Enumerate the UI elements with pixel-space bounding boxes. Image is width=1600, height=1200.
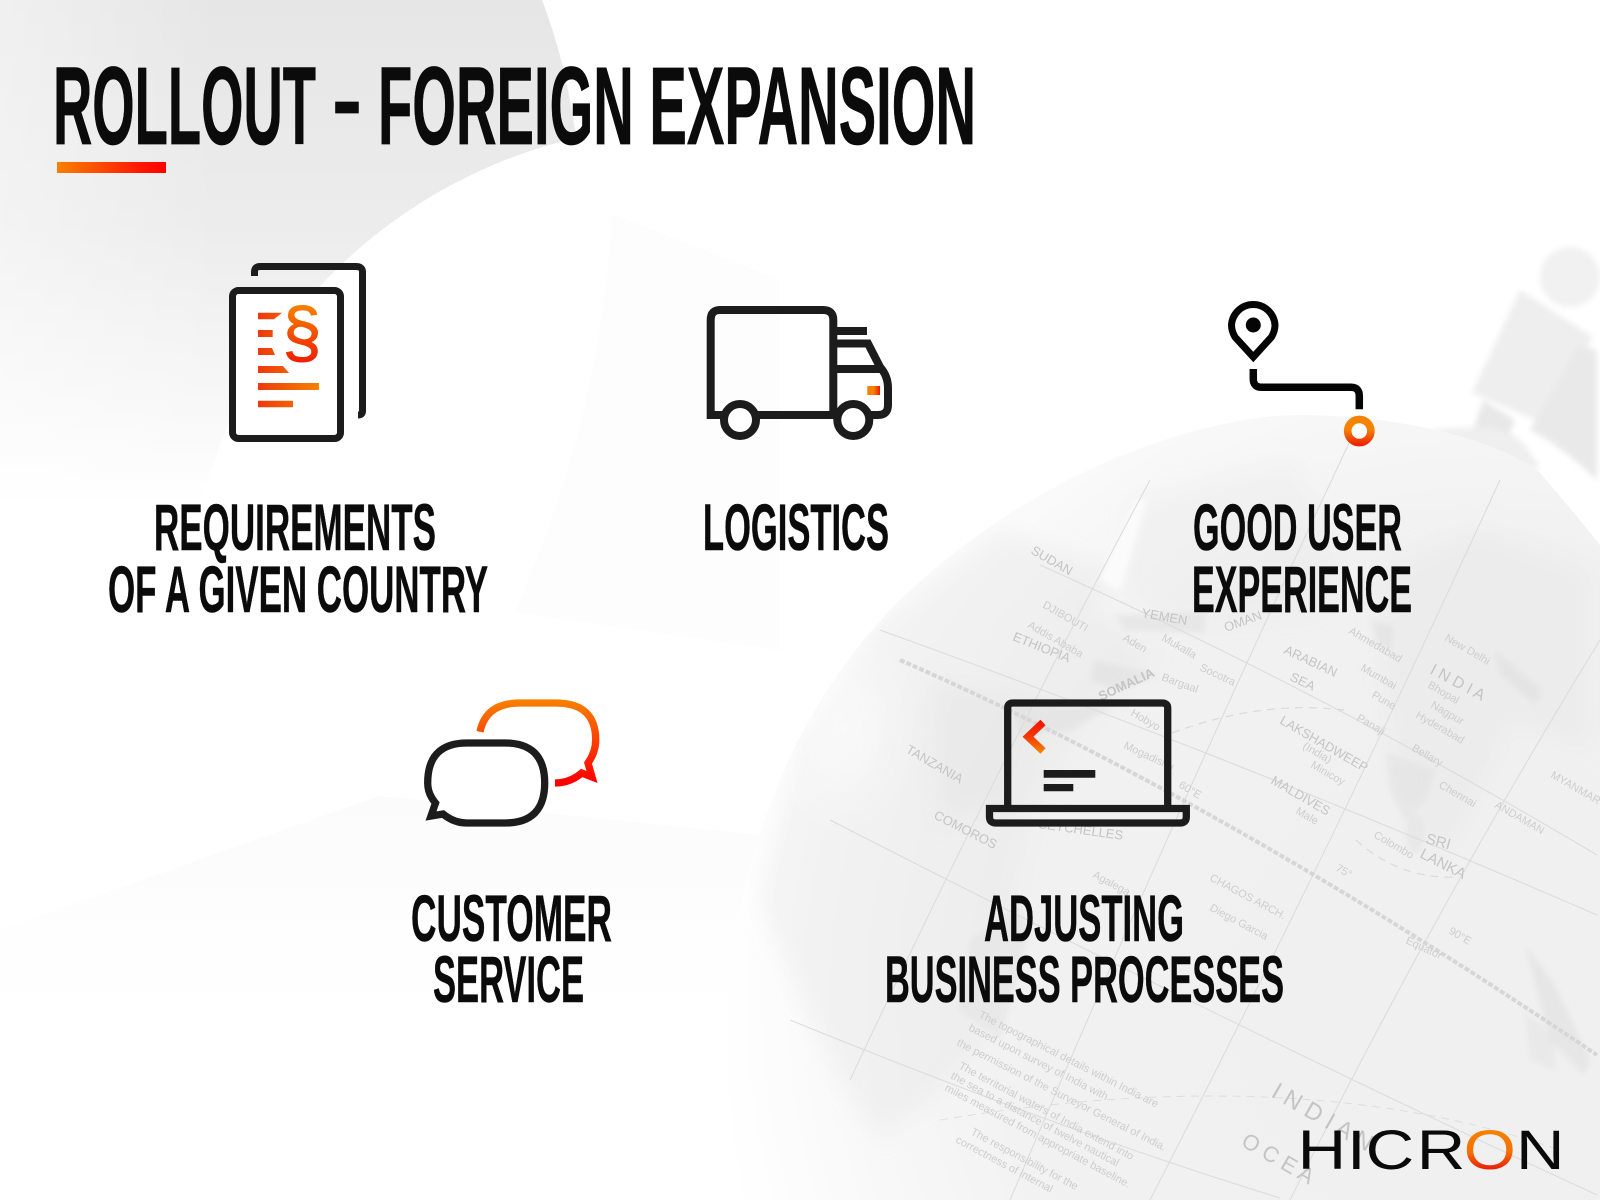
- map labels: [904, 543, 1600, 1195]
- map labels: ANDAMAN: [1492, 799, 1546, 837]
- globe sphere: [728, 415, 1600, 1200]
- title: –: [334, 38, 360, 161]
- red sea: [1105, 511, 1140, 584]
- item: logistics: [703, 310, 889, 564]
- icon: map pin route: [1232, 304, 1371, 443]
- map labels: I N D I A N: [1267, 1078, 1378, 1157]
- label: ADJUSTING: [984, 881, 1184, 955]
- icon: speech bubbles: [428, 703, 596, 823]
- map labels: based upon survey of India with: [967, 1022, 1110, 1103]
- icon: delivery truck: [711, 310, 888, 436]
- map labels: DJIBOUTI: [1040, 599, 1090, 635]
- background: globe photo: [728, 247, 1600, 1200]
- map labels: Panaji: [1354, 712, 1387, 738]
- map labels: O C E A: [1238, 1128, 1319, 1189]
- map labels: Hobyo: [1128, 707, 1162, 733]
- label: [1192, 490, 1412, 626]
- map labels: 90°E: [1446, 925, 1473, 948]
- map labels: miles measured from appropriate baseline.: [943, 1082, 1132, 1191]
- map labels: SUDAN: [1028, 543, 1075, 578]
- item: requirements of a given country: [108, 266, 488, 626]
- icon: legal documents: [232, 266, 362, 438]
- map labels: LANKA: [1417, 845, 1469, 883]
- map labels: Bellary: [1410, 742, 1445, 770]
- map labels: The territorial waters of India extend into: [957, 1060, 1136, 1163]
- label: [885, 881, 1284, 1016]
- globe stand: [1430, 247, 1600, 480]
- map labels: Socotra: [1198, 662, 1238, 689]
- map labels: Chennai: [1436, 779, 1478, 810]
- map labels: SEYCHELLES: [1038, 816, 1124, 843]
- item: customer service: [411, 703, 612, 1016]
- title: FOREIGN EXPANSION: [378, 45, 976, 168]
- map labels: ARABIAN: [1282, 642, 1340, 680]
- map labels: Nagpur: [1428, 699, 1466, 728]
- label: OF A GIVEN COUNTRY: [108, 552, 488, 626]
- map labels: (India): [1300, 740, 1334, 766]
- map labels: correctness of internal: [954, 1134, 1055, 1195]
- map labels: Pune: [1370, 689, 1398, 712]
- map labels: Ahmedabad: [1346, 625, 1404, 665]
- map labels: Aden: [1120, 632, 1149, 655]
- map labels: 60°E: [1176, 779, 1203, 802]
- map labels: COMOROS: [932, 807, 1000, 852]
- map labels: LAKSHADWEEP: [1278, 713, 1371, 775]
- logo: Hicron: HICRON: [1298, 1119, 1564, 1182]
- map labels: Agalega: [1091, 869, 1133, 899]
- title underline: [57, 162, 166, 173]
- map labels: YEMEN: [1140, 605, 1189, 628]
- title: [53, 38, 976, 168]
- label: LOGISTICS: [703, 490, 889, 564]
- map labels: The topographical details within India are: [977, 1009, 1160, 1110]
- map labels: Diego Garcia: [1208, 902, 1271, 943]
- map labels: Bhopal: [1426, 679, 1461, 707]
- map labels: The responsibility for the: [969, 1126, 1080, 1193]
- icon: legal documents: §: [283, 293, 321, 371]
- coastal patches: [960, 613, 1590, 1075]
- map labels: OMAN: [1222, 607, 1264, 635]
- label: CUSTOMER: [411, 881, 612, 955]
- map labels: Bargaal: [1160, 672, 1200, 696]
- label: REQUIREMENTS: [154, 490, 436, 564]
- map labels: Colombo: [1372, 829, 1416, 862]
- graticule: [790, 420, 1600, 1200]
- map labels: 75°: [1334, 862, 1354, 881]
- item: good user experience: [1192, 304, 1412, 626]
- label: GOOD USER: [1193, 490, 1402, 564]
- map labels: Mumbai: [1358, 662, 1398, 692]
- land masses: [778, 658, 1028, 902]
- map labels: CHAGOS ARCH.: [1208, 872, 1288, 922]
- map labels: SOMALIA: [1096, 665, 1157, 704]
- map labels: Hyderabad: [1414, 709, 1466, 747]
- item: adjusting business processes: [885, 703, 1284, 1016]
- label: [411, 881, 612, 1016]
- map labels: TANZANIA: [904, 742, 966, 786]
- map labels: the sea to a distance of twelve nautical: [949, 1070, 1121, 1169]
- map labels: I N D I A: [1427, 662, 1488, 705]
- map labels: the permission of the Surveyor General of India.: [955, 1037, 1168, 1154]
- map labels: SRI: [1424, 830, 1453, 853]
- map labels: SEA: [1288, 669, 1318, 694]
- icon: laptop: [990, 703, 1186, 823]
- label: SERVICE: [433, 942, 584, 1016]
- map labels: ETHIOPIA: [1011, 629, 1073, 666]
- equator: [900, 660, 1597, 1055]
- map labels: Equator: [1404, 935, 1444, 962]
- map labels: Mukalla: [1160, 632, 1199, 662]
- map labels: Male: [1294, 805, 1320, 828]
- map labels: Addis Ababa: [1026, 619, 1086, 661]
- background: grey swoosh at top left: [0, 0, 1200, 1135]
- label: [108, 490, 488, 626]
- map labels: Minicoy: [1308, 759, 1347, 788]
- map labels: New Delhi: [1442, 632, 1492, 668]
- title: ROLLOUT: [53, 45, 316, 168]
- map labels: MALDIVES: [1268, 773, 1333, 819]
- map labels: Mogadishu: [1122, 740, 1176, 773]
